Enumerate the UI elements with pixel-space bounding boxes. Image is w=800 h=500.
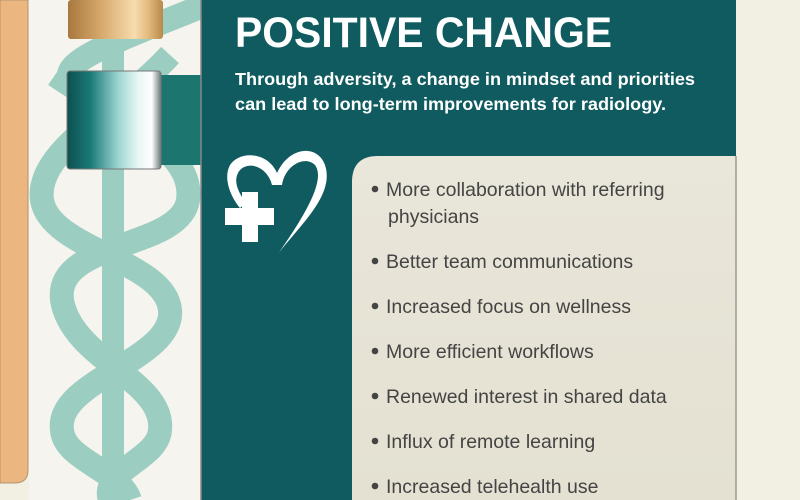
teal band	[160, 75, 201, 165]
list items: More efficient workflows	[386, 341, 594, 363]
list items: Influx of remote learning	[386, 431, 595, 453]
caduceus	[42, 5, 205, 500]
subtitle: Through adversity, a change in mindset and priorities	[235, 69, 695, 89]
teal cylinder	[67, 71, 161, 169]
list items: physicians	[388, 206, 479, 228]
list items: Increased telehealth use	[386, 476, 598, 498]
icon: heart with cross	[225, 151, 327, 254]
subtitle	[235, 69, 695, 114]
list items: Renewed interest in shared data	[386, 386, 667, 408]
subtitle: can lead to long-term improvements for radiology.	[235, 94, 666, 114]
peach bar	[0, 0, 28, 483]
background left strip	[29, 0, 201, 500]
list items	[372, 179, 667, 498]
gold cylinder	[68, 0, 163, 39]
list items: More collaboration with referring	[386, 179, 665, 201]
main panel	[201, 0, 736, 500]
list items: Increased focus on wellness	[386, 296, 631, 318]
list items: Better team communications	[386, 251, 633, 273]
list box	[352, 156, 736, 500]
title: POSITIVE CHANGE	[235, 9, 612, 57]
